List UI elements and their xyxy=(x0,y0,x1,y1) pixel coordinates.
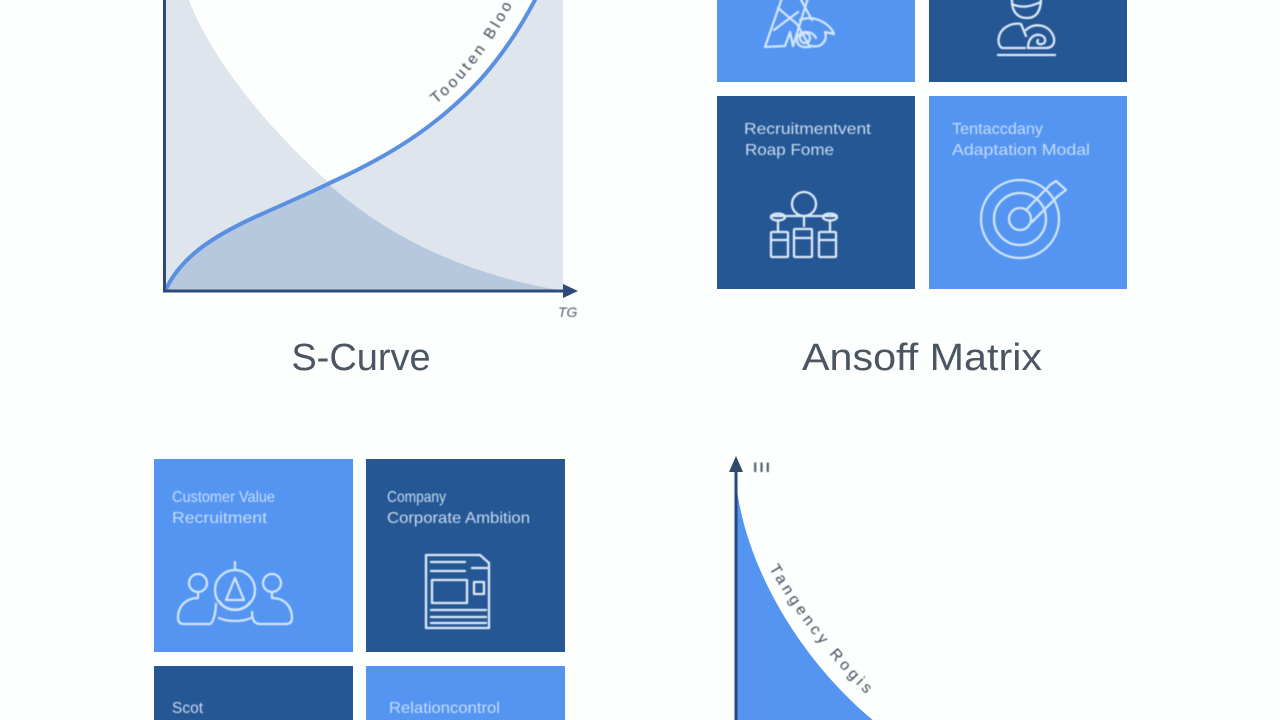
tile: top right xyxy=(366,459,565,652)
white region above the curves xyxy=(188,0,536,181)
tile: bottom right xyxy=(366,666,565,720)
icon: document xyxy=(426,555,489,628)
tile: bottom left xyxy=(717,96,915,289)
y axis xyxy=(163,0,166,292)
tile label: Customer Value xyxy=(172,489,275,506)
blue area under curve xyxy=(737,490,875,720)
icon: hierarchy xyxy=(771,192,837,257)
panel: Ansoff Matrix grid xyxy=(717,0,1127,289)
tile: bottom right xyxy=(929,96,1127,289)
panel: decay curve chart xyxy=(729,456,872,720)
tile label: Adaptation Modal xyxy=(952,142,1090,159)
curve label: Tangency Rogis xyxy=(770,562,872,694)
tile label: Tentaccdany xyxy=(952,121,1043,138)
tile label: Roap Fome xyxy=(745,142,834,159)
heading: S-Curve: S-Curve xyxy=(291,337,431,379)
icon: target xyxy=(981,180,1066,258)
icon: team with compass xyxy=(178,562,292,624)
panel: lower left matrix grid xyxy=(154,459,565,720)
overlap region under both curves xyxy=(166,183,558,290)
panel: S-Curve chart xyxy=(163,0,578,320)
tile label: Relationcontrol xyxy=(389,700,500,717)
S-curve line xyxy=(166,0,536,289)
tile label: Scot xyxy=(172,700,204,717)
tile label: Company xyxy=(387,489,446,506)
y axis label: III xyxy=(752,459,771,475)
icon: person with spiral xyxy=(998,0,1055,55)
x axis with arrow xyxy=(163,284,578,298)
heading: Ansoff Matrix: Ansoff Matrix xyxy=(802,337,1042,379)
tile label: Recruitmentvent xyxy=(744,121,872,138)
tile label: Corporate Ambition xyxy=(387,510,530,527)
tile label: Recruitment xyxy=(172,510,268,527)
icon: figure outline xyxy=(765,0,834,47)
grey chart area xyxy=(164,0,563,291)
tile: top left xyxy=(717,0,915,82)
tile: top left xyxy=(154,459,353,652)
tile: top right xyxy=(929,0,1127,82)
tile: bottom left xyxy=(154,666,353,720)
y axis with arrow xyxy=(729,456,743,720)
x axis label: TG xyxy=(558,304,578,320)
